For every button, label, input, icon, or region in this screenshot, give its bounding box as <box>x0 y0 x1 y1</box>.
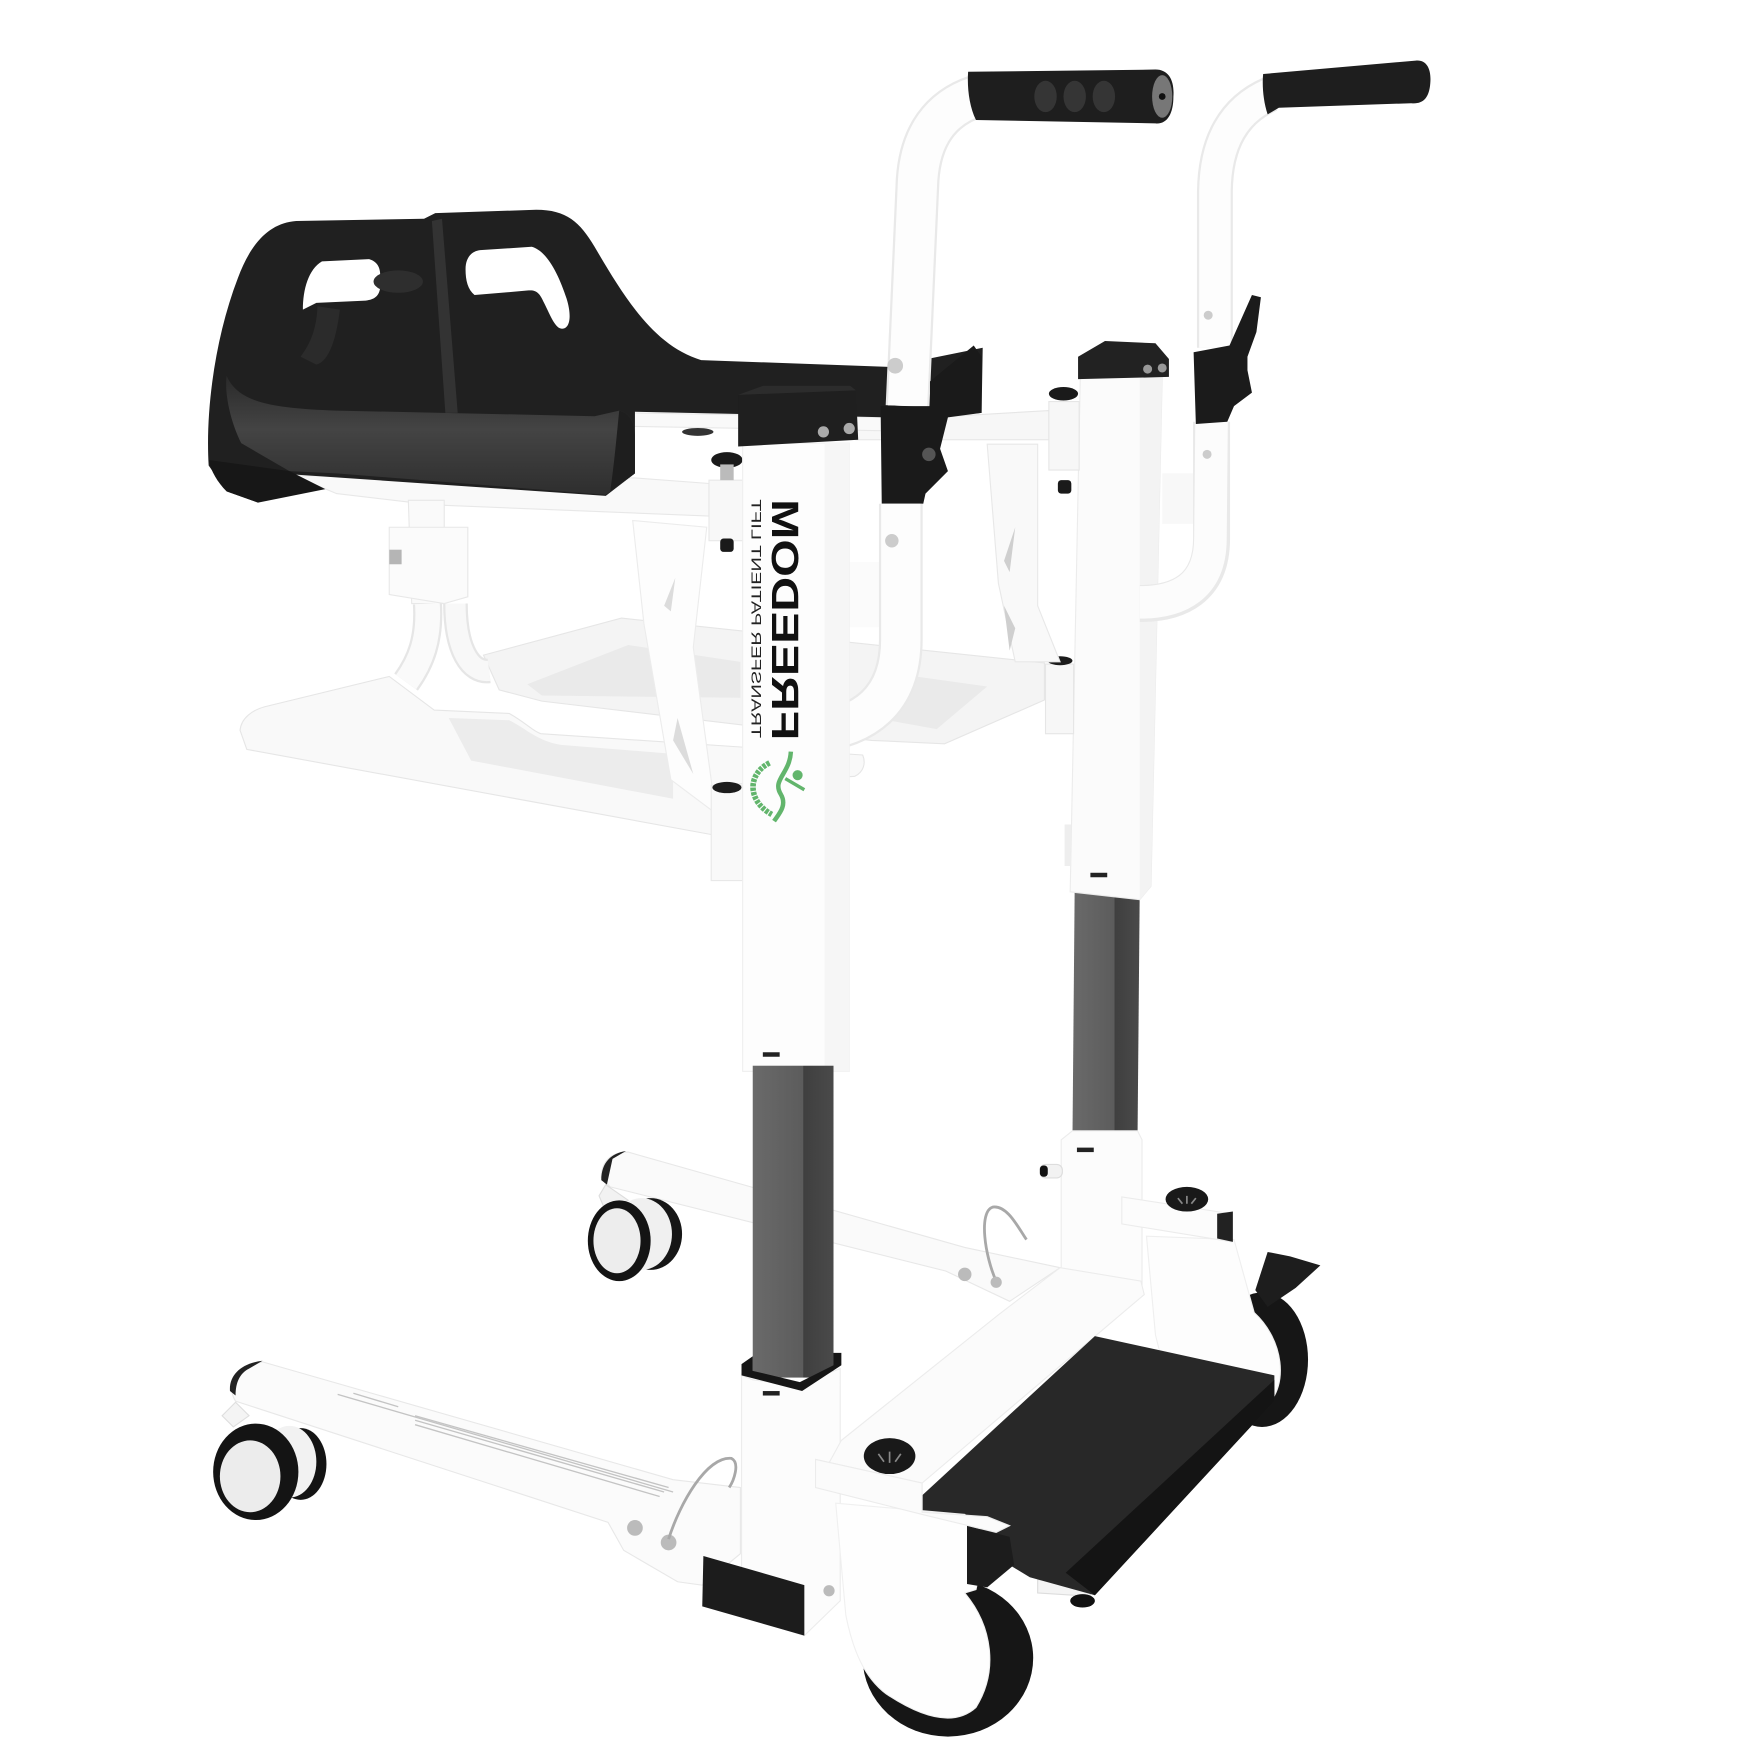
brand text mirrored on post: FREEDOM <box>763 499 806 740</box>
post cap <box>1078 341 1169 379</box>
left clamp lever <box>881 346 982 504</box>
black seat shell <box>208 210 983 503</box>
right push handle <box>1140 60 1430 604</box>
brand text mirrored on post: TRANSFER PATIENT LIFT <box>749 499 765 738</box>
front crossbar and U-shaped tube <box>811 499 901 731</box>
brand text mirrored on post <box>749 499 806 740</box>
front knob <box>864 1438 915 1474</box>
base beam <box>816 1187 1233 1488</box>
rear base leg with caster <box>588 1151 1060 1301</box>
lower collar and black foot <box>702 1353 841 1636</box>
rear footrest plate <box>484 618 1044 744</box>
left push handle <box>881 70 1174 504</box>
support tubes and hub <box>389 452 744 682</box>
right caster wheel <box>1146 1236 1320 1427</box>
black anti-slip footplate <box>922 1336 1274 1608</box>
front footrest plate <box>240 676 864 836</box>
front grey inner tube <box>753 1066 834 1378</box>
right clamp lever <box>1194 295 1261 424</box>
icon: green brand logo <box>753 752 804 821</box>
rear post with grey inner tube <box>1040 341 1169 1290</box>
rear knob <box>1166 1187 1208 1212</box>
front strut plate <box>633 521 743 881</box>
rear wire pin <box>984 1207 1026 1281</box>
warning label <box>338 1393 673 1496</box>
front post <box>738 386 858 1071</box>
rear seat rail <box>856 387 1079 662</box>
front big caster <box>816 1438 1033 1737</box>
front base leg with caster <box>213 1361 740 1585</box>
front seat rail <box>294 413 886 516</box>
front post cap <box>738 386 858 446</box>
